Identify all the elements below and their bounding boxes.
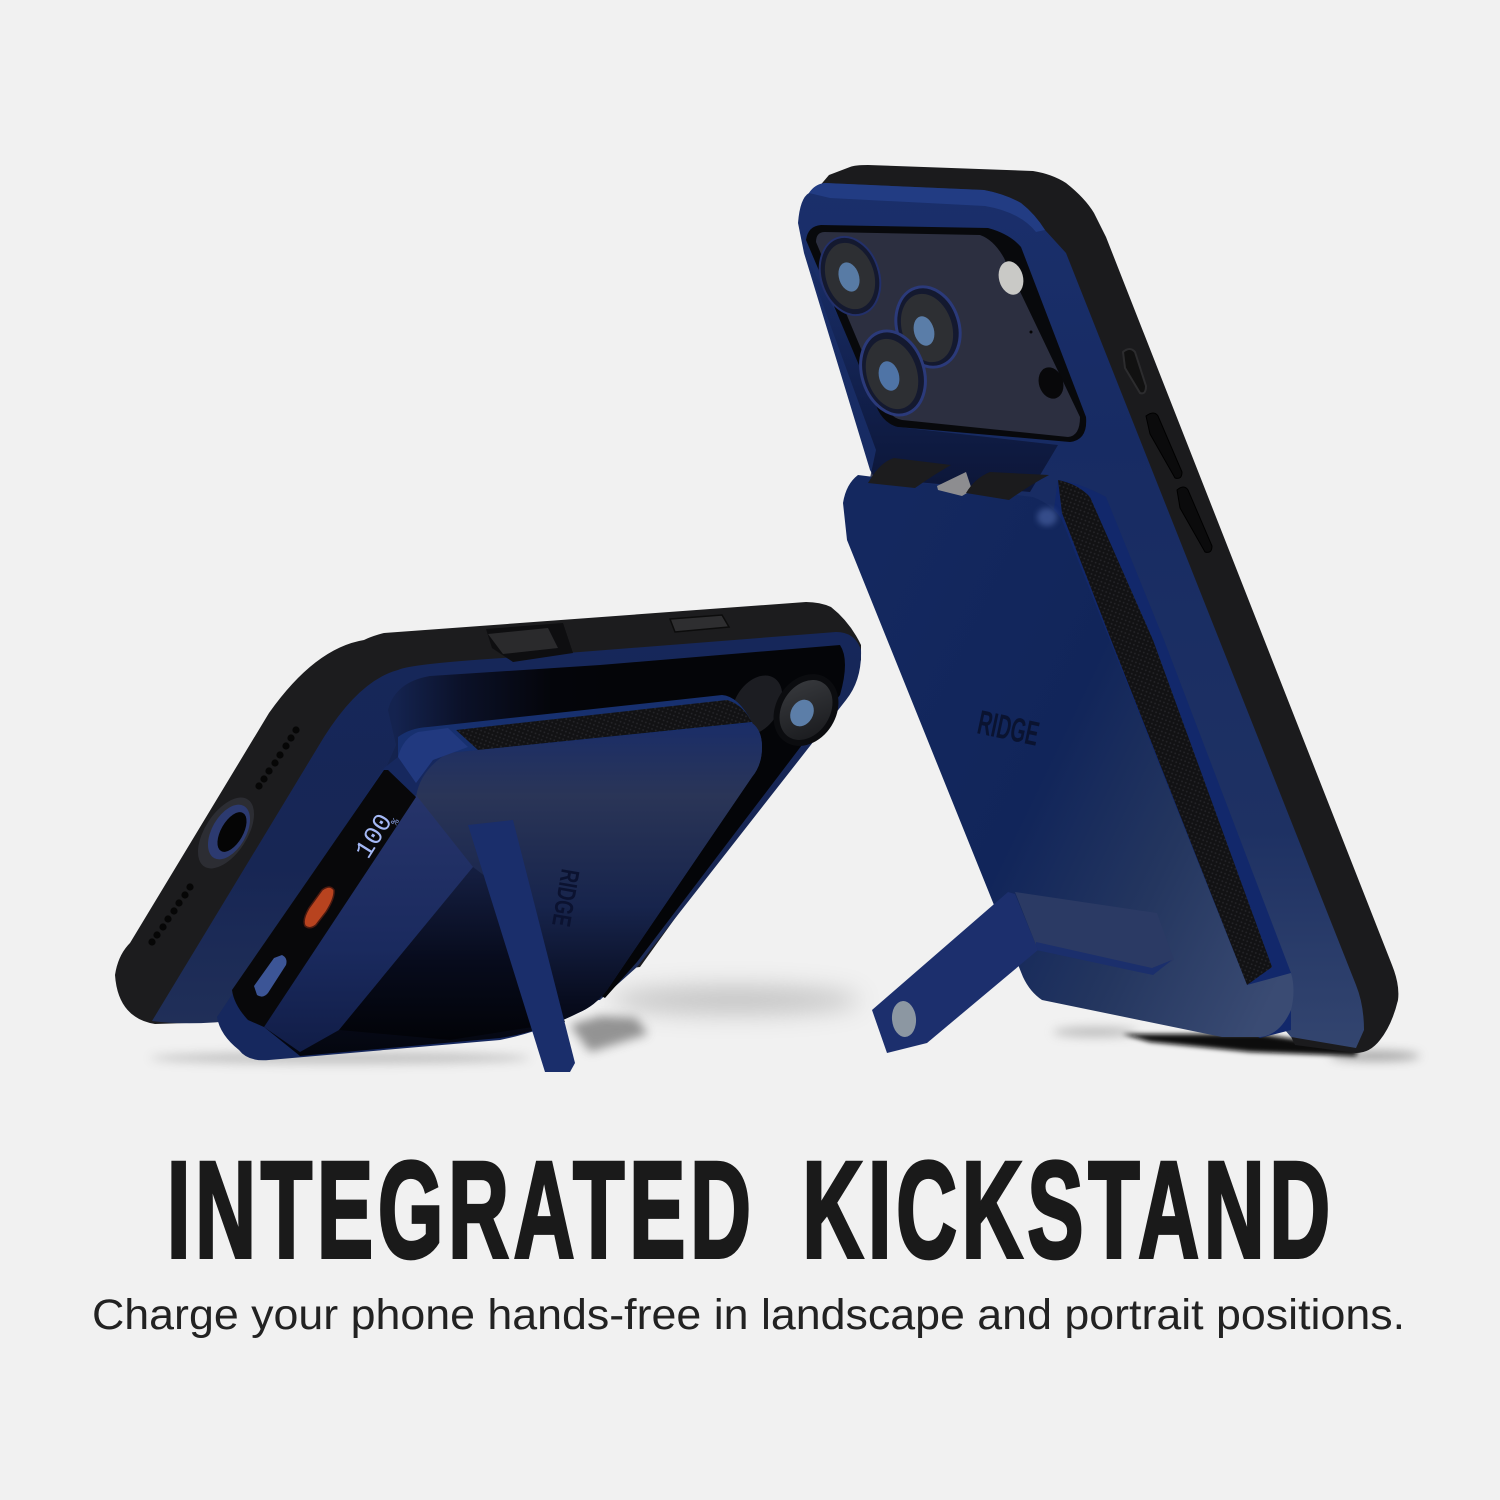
side buttons	[1123, 349, 1212, 552]
phone blue frame	[798, 183, 1364, 1048]
power bank top edge and mesh	[398, 695, 762, 790]
phone blue frame	[152, 632, 861, 1023]
charging port	[187, 788, 265, 878]
phone camera recess shadow	[385, 645, 845, 998]
inner frame edge	[1000, 480, 1292, 1038]
LED display: 100	[349, 809, 400, 864]
side panel black strip	[232, 770, 416, 1027]
USB-C port	[304, 887, 334, 928]
body corner highlight	[1037, 508, 1057, 526]
phone black bumper	[115, 602, 861, 1024]
corner highlight	[398, 728, 468, 783]
dark band under rim and camera	[804, 253, 1058, 492]
side blue band	[264, 795, 473, 1052]
device: right phone in portrait	[798, 165, 1398, 1053]
power button	[254, 955, 286, 997]
power bank main body	[217, 723, 762, 1060]
RIDGE logo: RIDGE	[974, 703, 1042, 753]
device: left power bank with kickstand	[217, 695, 762, 1072]
subtitle: Charge your phone hands-free in landscape and portrait positions.	[92, 1291, 1405, 1339]
power bank face	[264, 723, 762, 1056]
flash	[995, 258, 1027, 298]
camera recess	[806, 225, 1086, 442]
device: right power bank with kickstand	[843, 458, 1294, 1053]
faint power bank logo: RIDGE	[546, 867, 585, 929]
kickstand magnet	[890, 1000, 918, 1038]
kickstand arm	[872, 892, 1038, 1053]
top side buttons	[486, 615, 729, 662]
mesh side	[1058, 480, 1272, 985]
main body	[843, 475, 1294, 1037]
phone black bumper	[812, 165, 1398, 1053]
microphone and sensor	[1030, 330, 1032, 334]
lighter rim highlight	[809, 183, 1045, 232]
LED display: %	[390, 817, 403, 828]
lens 2	[886, 278, 970, 376]
charging cables	[868, 458, 1049, 500]
lens 1	[810, 229, 890, 323]
lens 3	[850, 323, 936, 423]
visible lenses	[721, 662, 852, 758]
lower recess	[339, 867, 565, 1040]
speaker grille dots	[148, 726, 300, 946]
device: left phone in landscape	[115, 602, 861, 1024]
kickstand recess	[1015, 892, 1174, 973]
shadows under devices	[150, 986, 1420, 1064]
kickstand	[468, 820, 575, 1072]
